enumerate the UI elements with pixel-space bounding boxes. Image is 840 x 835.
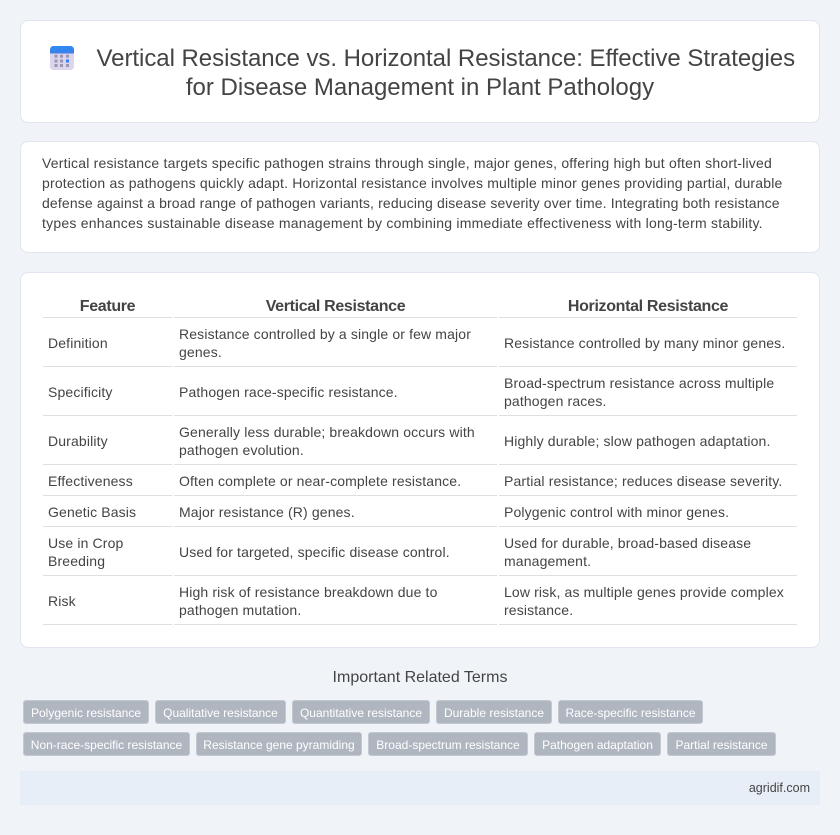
tag: Qualitative resistance [163, 706, 278, 720]
tag: Pathogen adaptation [542, 738, 653, 752]
header: Horizontal Resistance: Horizontal Resistance [568, 298, 728, 315]
row: Risk: resistance. [504, 602, 573, 618]
tag [667, 732, 776, 756]
row: Durability: pathogen evolution. [179, 442, 304, 458]
row: Definition [48, 326, 785, 360]
tag: Race-specific resistance [565, 706, 696, 720]
tag: Partial resistance [675, 738, 768, 752]
related terms tags [23, 700, 776, 756]
heading: for Disease Management in Plant Pathology [186, 74, 654, 101]
text block: summary: Vertical resistance targets specific pathogen strains through single, major genes, offering high but often short-lived [42, 155, 772, 171]
row: Genetic Basis: Major resistance (R) genes. [179, 504, 355, 520]
row: Effectiveness: Often complete or near-complete resistance. [179, 473, 461, 489]
row: Definition: Definition [48, 335, 108, 351]
text block: summary: defense against a broad range of pathogen variants, reducing disease severity over time. Integrating both resistance [42, 195, 780, 211]
row: Effectiveness: Effectiveness [48, 473, 133, 489]
tag [436, 700, 552, 724]
row: Definition: Resistance controlled by a single or few major [179, 326, 471, 342]
row: Genetic Basis [48, 504, 729, 520]
row: Durability: Highly durable; slow pathogen adaptation. [504, 433, 770, 449]
tag: Quantitative resistance [300, 706, 422, 720]
row: Risk [48, 584, 784, 618]
header: Feature: Feature [80, 298, 135, 315]
text block: summary [42, 155, 783, 231]
heading [96, 45, 795, 101]
icon: calendar [50, 46, 74, 70]
footer text: agridif.com [749, 781, 810, 795]
row: Durability [48, 424, 770, 458]
tag [196, 732, 362, 756]
tag: Broad-spectrum resistance [376, 738, 520, 752]
tag [368, 732, 528, 756]
comparison table [43, 298, 797, 625]
panel: title card [20, 20, 820, 123]
tag: Non-race-specific resistance [31, 738, 182, 752]
row: Genetic Basis: Genetic Basis [48, 504, 136, 520]
row: Specificity [48, 375, 774, 409]
panel: summary card [20, 141, 820, 253]
panel: comparison table card [20, 272, 820, 648]
text block: summary: protection as pathogens quickly adapt. Horizontal resistance involves multiple minor genes providing partial, durable [42, 175, 783, 191]
row: Definition: genes. [179, 344, 222, 360]
row: Use in Crop Breeding: Use in Crop [48, 535, 123, 551]
row: Durability: Generally less durable; breakdown occurs with [179, 424, 475, 440]
row: Genetic Basis: Polygenic control with minor genes. [504, 504, 729, 520]
row: Risk: High risk of resistance breakdown due to [179, 584, 438, 600]
row: Use in Crop Breeding: Used for targeted, specific disease control. [179, 544, 450, 560]
footer bar [20, 771, 820, 805]
row: Use in Crop Breeding: Breeding [48, 553, 105, 569]
tag: Polygenic resistance [31, 706, 141, 720]
tag [23, 732, 190, 756]
row: Definition: Resistance controlled by many minor genes. [504, 335, 785, 351]
header: Vertical Resistance: Vertical Resistance [266, 298, 405, 315]
row: Risk: Risk [48, 593, 76, 609]
row: Specificity: Pathogen race-specific resistance. [179, 384, 398, 400]
row: Risk: Low risk, as multiple genes provide complex [504, 584, 784, 600]
row: Use in Crop Breeding: management. [504, 553, 591, 569]
row: Specificity: Broad-spectrum resistance across multiple [504, 375, 774, 391]
tag: Durable resistance [444, 706, 544, 720]
row: Effectiveness [48, 473, 782, 489]
row: Specificity: pathogen races. [504, 393, 607, 409]
row: Risk: pathogen mutation. [179, 602, 301, 618]
heading: Important Related Terms: Important Related Terms [333, 669, 507, 686]
text block: summary: types enhances sustainable disease management by combining immediate effectiveness with long-term stability. [42, 215, 763, 231]
tag [558, 700, 703, 724]
row: Use in Crop Breeding [48, 535, 751, 569]
row: Use in Crop Breeding: Used for durable, broad-based disease [504, 535, 751, 551]
row: Durability: Durability [48, 433, 108, 449]
tag [23, 700, 149, 724]
heading: Vertical Resistance vs. Horizontal Resistance: Effective Strategies [96, 45, 795, 72]
tag [155, 700, 286, 724]
tag: Resistance gene pyramiding [203, 738, 355, 752]
tag [534, 732, 661, 756]
tag [292, 700, 430, 724]
row: Effectiveness: Partial resistance; reduces disease severity. [504, 473, 782, 489]
row: Specificity: Specificity [48, 384, 113, 400]
